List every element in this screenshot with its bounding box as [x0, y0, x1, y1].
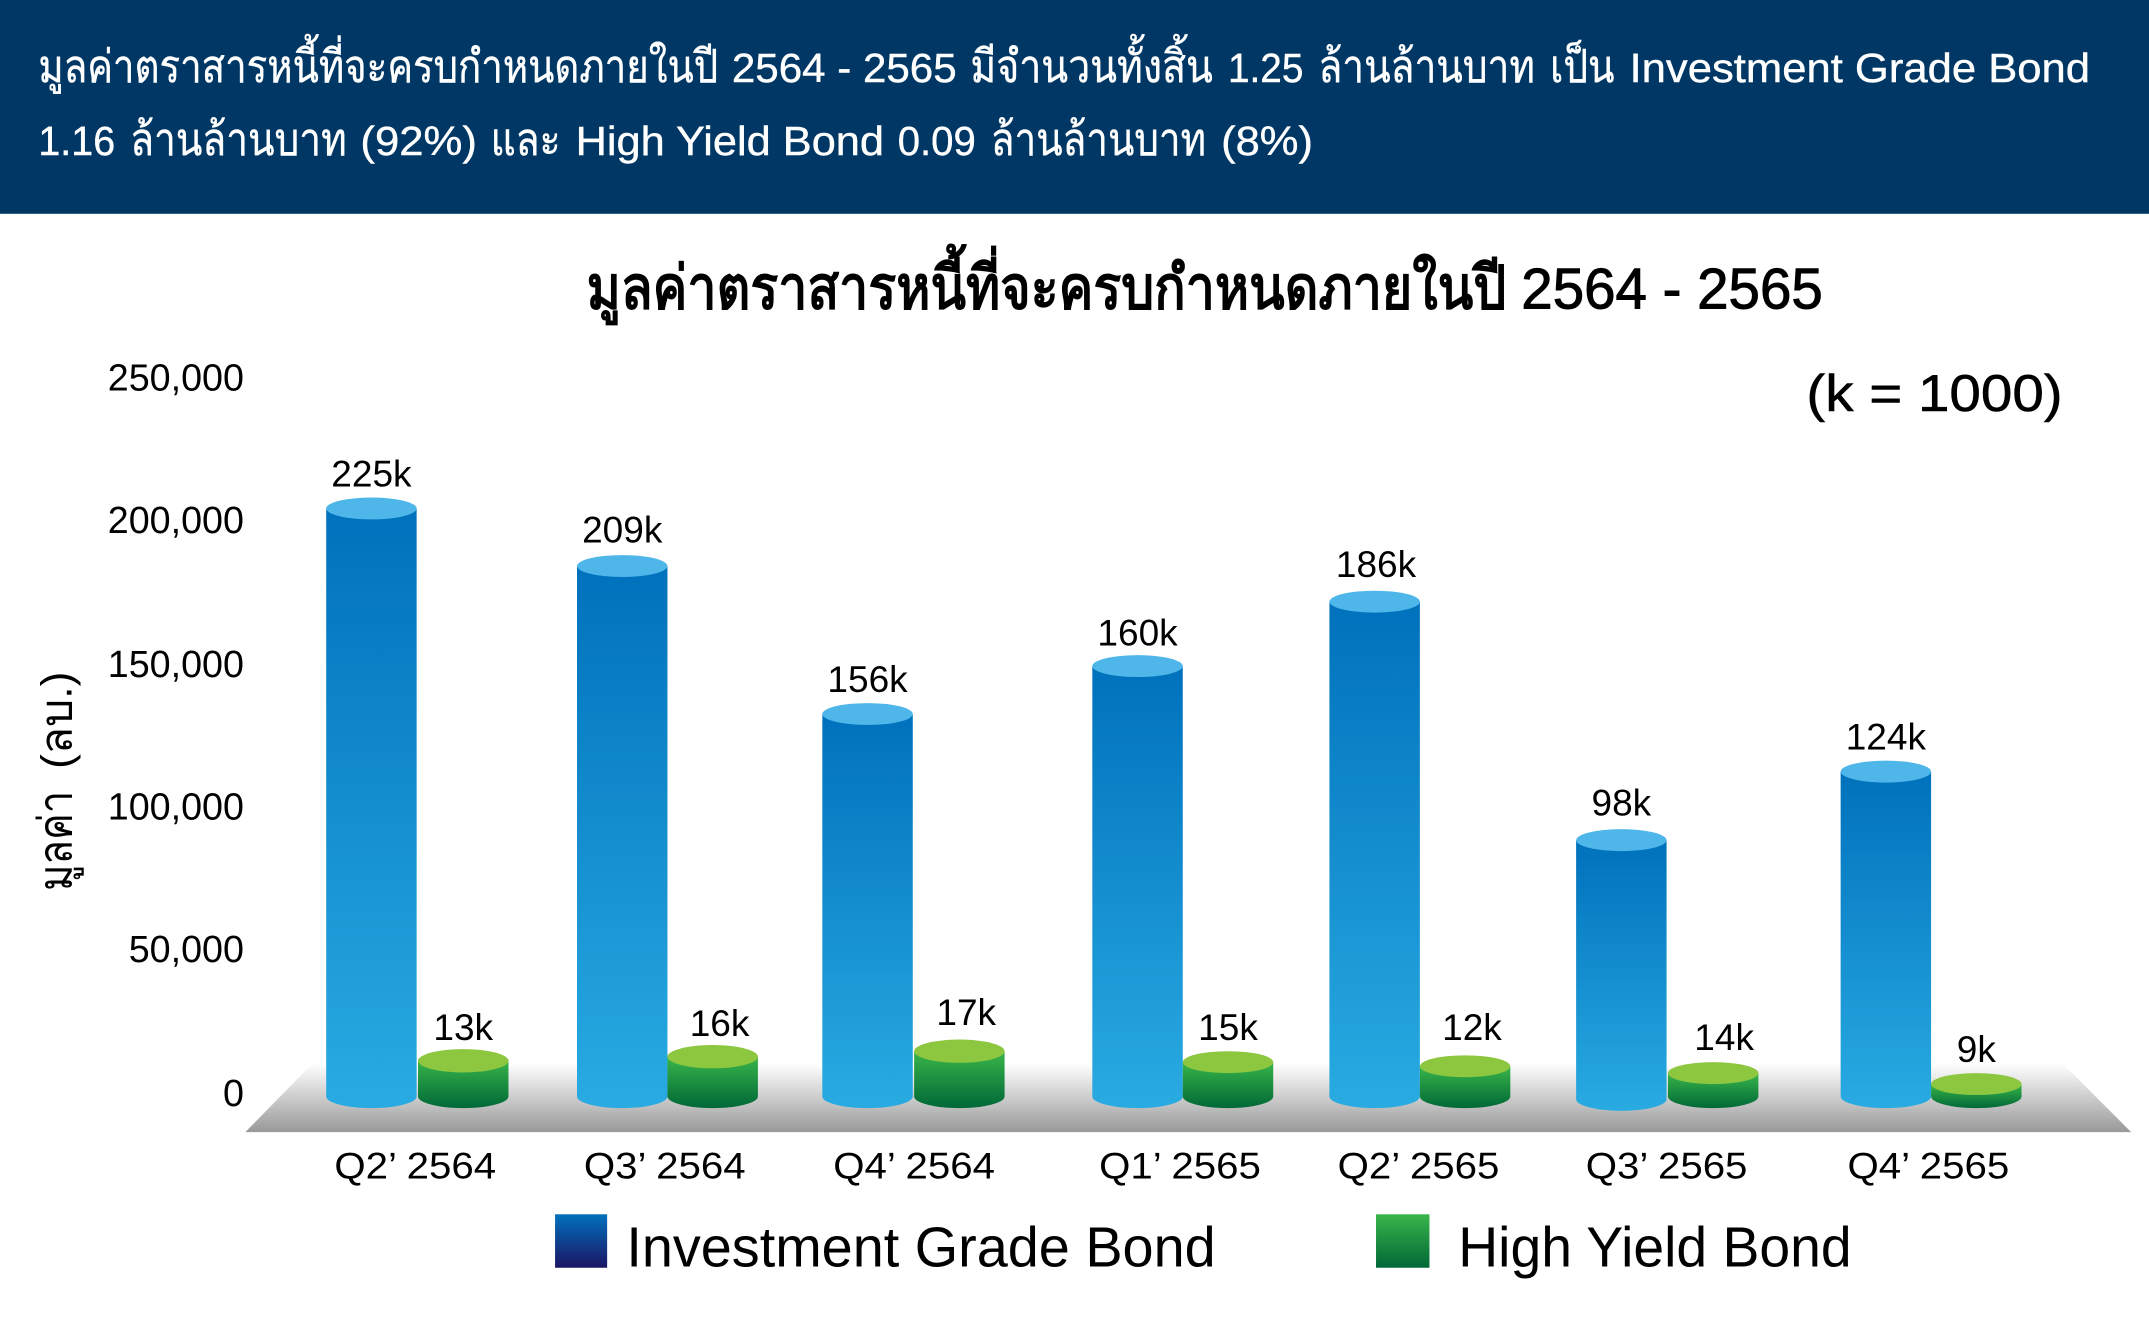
header text line 1: Investment Grade Bond	[1630, 45, 2090, 91]
header text line 2	[38, 114, 1313, 165]
y axis labels: 200,000	[108, 499, 244, 541]
header text line 2: (8%)	[1221, 118, 1313, 164]
header banner	[0, 0, 2149, 214]
header text line 1: 2564 - 2565	[732, 45, 957, 91]
quarter Q4 2564 bars: 156k	[827, 659, 908, 700]
quarter Q2 2564 bars	[326, 454, 508, 1108]
chart title: มูลค่าตราสารหนี้ที่จะครบกำหนดภายในปี	[587, 243, 1506, 325]
quarter Q1 2565 bars: 160k	[1097, 613, 1178, 654]
x axis labels: Q1’ 2565	[1099, 1146, 1261, 1187]
header text line 1: มีจำนวนทั้งสิ้น	[970, 34, 1213, 92]
quarter Q3 2564 bars: 16k	[690, 1003, 750, 1044]
y axis labels: 250,000	[108, 357, 244, 399]
y axis title: มูลค่า	[29, 791, 84, 891]
header text line 1: มูลค่าตราสารหนี้ที่จะครบกำหนดภายในปี	[38, 34, 718, 94]
quarter Q2 2565 bars: 186k	[1336, 544, 1417, 585]
quarter Q4 2564 bars	[822, 659, 1005, 1108]
x axis labels: Q2’ 2564	[334, 1146, 496, 1187]
quarter Q4 2565 bars: 124k	[1846, 717, 1926, 758]
legend	[555, 1214, 1852, 1278]
y axis title	[29, 672, 84, 891]
y axis labels: 0	[223, 1072, 244, 1114]
quarter Q2 2564 bars: 225k	[331, 454, 412, 495]
header text line 2: ล้านล้านบาท	[130, 114, 347, 165]
legend swatch: high yield	[1376, 1214, 1429, 1268]
quarter Q3 2565 bars: 98k	[1592, 782, 1652, 823]
header text line 2: (92%)	[360, 118, 477, 164]
y axis labels: 50,000	[129, 928, 244, 970]
x axis labels: Q2’ 2565	[1338, 1146, 1499, 1187]
y axis labels: 150,000	[108, 643, 244, 685]
header text line 2: 0.09	[898, 118, 976, 164]
quarter Q4 2565 bars	[1841, 717, 2022, 1108]
x axis labels: Q3’ 2565	[1586, 1146, 1747, 1187]
y axis labels: 100,000	[108, 786, 244, 828]
header text line 1: ล้านล้านบาท	[1318, 41, 1535, 92]
quarter Q2 2565 bars	[1329, 544, 1510, 1108]
quarter Q3 2564 bars: 209k	[582, 510, 663, 551]
header text line 2: 1.16	[38, 118, 115, 164]
quarter Q4 2565 bars: 9k	[1957, 1029, 1996, 1070]
header text line 1	[38, 34, 2090, 94]
header text line 2: และ	[491, 114, 561, 165]
legend label: high yield: High Yield Bond	[1458, 1215, 1852, 1278]
legend label: investment grade: Investment Grade Bond	[626, 1215, 1216, 1278]
quarter Q3 2565 bars	[1576, 782, 1758, 1111]
quarter Q2 2565 bars: 12k	[1442, 1007, 1502, 1048]
quarter Q1 2565 bars	[1092, 613, 1273, 1108]
x axis labels: Q3’ 2564	[584, 1146, 746, 1187]
quarter Q3 2565 bars: 14k	[1694, 1017, 1754, 1058]
x axis labels: Q4’ 2565	[1847, 1146, 2009, 1187]
floor plane	[245, 1064, 2131, 1132]
x axis labels	[334, 1146, 2009, 1187]
quarter Q3 2564 bars	[577, 510, 758, 1108]
legend swatch: investment grade	[555, 1214, 607, 1268]
quarter Q2 2564 bars: 13k	[433, 1007, 494, 1048]
y axis title: (ลบ.)	[32, 672, 81, 769]
chart title: 2564 - 2565	[1521, 257, 1823, 321]
header text line 1: 1.25	[1228, 45, 1303, 91]
header text line 1: เป็น	[1550, 40, 1614, 92]
y axis labels	[108, 357, 244, 1114]
header text line 2: ล้านล้านบาท	[991, 114, 1206, 165]
x axis labels: Q4’ 2564	[833, 1146, 995, 1187]
quarter Q4 2564 bars: 17k	[936, 992, 997, 1033]
header text line 2: High Yield Bond	[576, 118, 884, 164]
unit note: (k = 1000)	[1806, 365, 2063, 423]
quarter Q1 2565 bars: 15k	[1198, 1007, 1258, 1048]
